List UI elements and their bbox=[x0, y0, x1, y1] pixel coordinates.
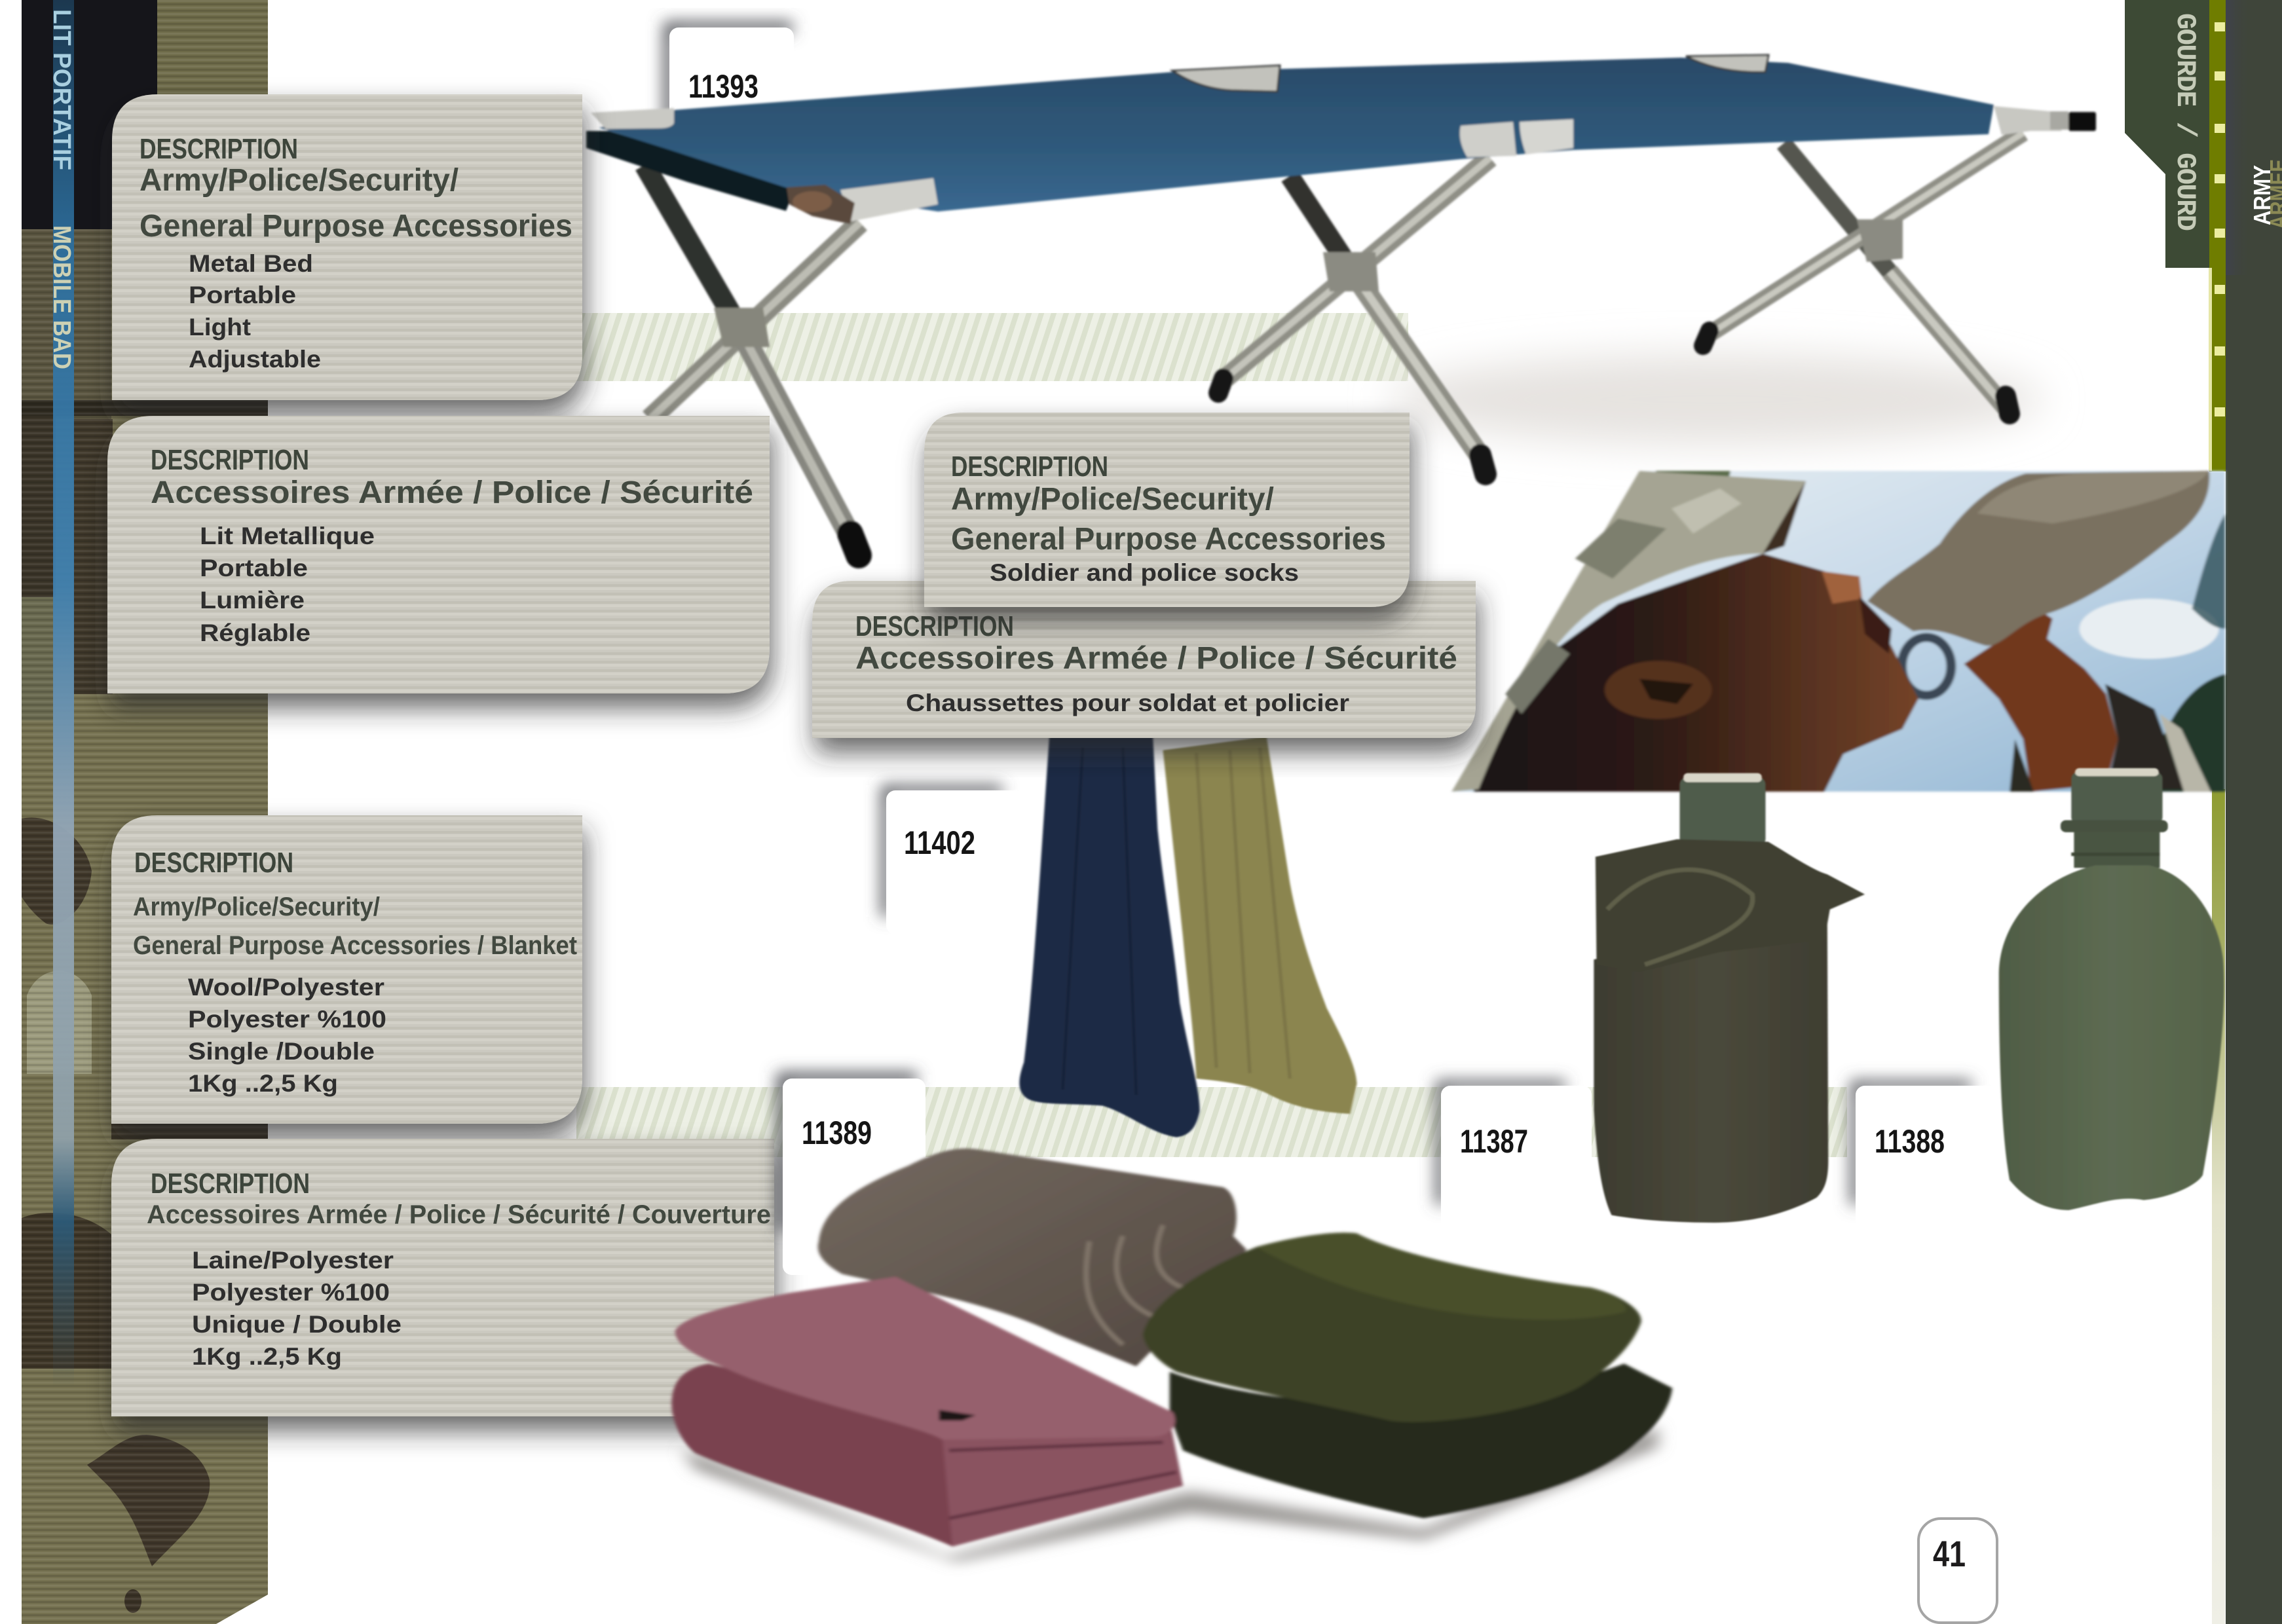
head bbox=[1473, 553, 1918, 792]
panel: blanket english bbox=[111, 815, 582, 1124]
socks bbox=[1019, 737, 1356, 1137]
black top band bbox=[22, 0, 157, 229]
photo background bbox=[1451, 471, 2225, 792]
canteen with cover bbox=[1594, 773, 1865, 1223]
sleeve bbox=[2105, 684, 2184, 789]
cap bbox=[1679, 777, 1765, 847]
panel text: Laine/Polyester bbox=[192, 1247, 394, 1274]
canteen in photo bbox=[1867, 471, 2209, 646]
folding bed bbox=[586, 55, 2096, 555]
panel text: General Purpose Accessories bbox=[951, 522, 1386, 557]
page number box bbox=[1918, 1519, 1997, 1623]
panel text bbox=[140, 133, 572, 373]
panel text: DESCRIPTION bbox=[855, 610, 1014, 642]
middle leg set bbox=[1218, 158, 1490, 474]
bed legs bbox=[645, 133, 2023, 555]
panel text: Single /Double bbox=[188, 1038, 375, 1065]
right green column bbox=[2125, 0, 2282, 1624]
panel: bed english bbox=[112, 94, 582, 400]
bed frame brackets bbox=[591, 55, 2096, 224]
panel text: Lit Metallique bbox=[200, 523, 375, 549]
bed underside bbox=[586, 131, 796, 211]
mauve blanket bbox=[672, 1363, 1183, 1547]
label: 11402 bbox=[886, 790, 1043, 934]
panel: bed french bbox=[107, 416, 770, 693]
panel text: Wool/Polyester bbox=[188, 974, 384, 1001]
panel text: DESCRIPTION bbox=[151, 444, 309, 476]
panel text: Light bbox=[189, 314, 251, 341]
panel text: DESCRIPTION bbox=[140, 133, 298, 165]
label: 11402: 11402 bbox=[904, 824, 975, 861]
panel text: Army/Police/Security/ bbox=[951, 482, 1274, 517]
tick marks bbox=[2215, 22, 2225, 416]
trees bbox=[2149, 674, 2225, 792]
far leg set bbox=[1703, 133, 2023, 414]
navy sock bbox=[1019, 737, 1200, 1137]
tab: gourde bbox=[2125, 0, 2209, 268]
panel text: 1Kg ..2,5 Kg bbox=[192, 1343, 342, 1370]
clouds bbox=[2080, 599, 2219, 659]
panel text: Réglable bbox=[200, 619, 310, 646]
cap bbox=[2071, 771, 2163, 824]
panel text: Polyester %100 bbox=[188, 1006, 386, 1033]
arm and hand bbox=[1964, 606, 2118, 792]
tab label: GOURDE / GOURD bbox=[2169, 13, 2201, 231]
fading lower stripe bbox=[2212, 789, 2225, 1624]
near leg set bbox=[645, 165, 860, 555]
cover body bbox=[1594, 910, 1828, 1223]
panel text: Army/Police/Security/ bbox=[140, 163, 458, 198]
cover flap bbox=[1596, 840, 1865, 972]
striped band: top bbox=[576, 313, 1408, 381]
blanket shadow bbox=[682, 1426, 1658, 1562]
olive stripe bbox=[2209, 0, 2226, 471]
panel text bbox=[951, 451, 1386, 586]
panel text bbox=[855, 610, 1457, 716]
panel text: Portable bbox=[200, 555, 308, 581]
photo: soldier drinking bbox=[1451, 471, 2225, 792]
panel text: DESCRIPTION bbox=[151, 1168, 310, 1200]
panel text: DESCRIPTION bbox=[951, 451, 1108, 483]
striped band: bottom bbox=[576, 1087, 1847, 1157]
panel text: Unique / Double bbox=[192, 1311, 402, 1338]
floor shadow under bed bbox=[1389, 354, 2044, 445]
panel: socks english bbox=[924, 413, 1410, 607]
brown blanket bbox=[818, 1149, 1246, 1367]
label: 11389 bbox=[783, 1079, 926, 1275]
panel text: Accessoires Armée / Police / Sécurité bbox=[855, 641, 1457, 676]
panel text: General Purpose Accessories bbox=[140, 209, 572, 244]
bed fabric bbox=[599, 58, 1994, 212]
panel text: General Purpose Accessories / Blanket bbox=[133, 931, 577, 960]
label: 11393 bbox=[669, 28, 794, 126]
panel text: Chaussettes pour soldat et policier bbox=[906, 690, 1349, 716]
panel text: Polyester %100 bbox=[192, 1279, 390, 1306]
panel text bbox=[147, 1168, 771, 1370]
plastic canteen bbox=[1999, 768, 2224, 1210]
hat bbox=[1451, 471, 1806, 792]
left camouflage strip bbox=[22, 0, 268, 1624]
panel text: 1Kg ..2,5 Kg bbox=[188, 1070, 338, 1097]
panel text: Lumière bbox=[200, 587, 305, 614]
panel text: Army/Police/Security/ bbox=[133, 893, 380, 921]
page number box: 41 bbox=[1933, 1533, 1966, 1574]
panel: socks french bbox=[812, 581, 1476, 738]
panel: blanket french bbox=[111, 1139, 774, 1416]
panel text: Accessoires Armée / Police / Sécurité bbox=[151, 475, 753, 510]
panel text: DESCRIPTION bbox=[134, 847, 293, 879]
body bbox=[1999, 865, 2224, 1210]
panel text: Portable bbox=[189, 282, 296, 308]
panel text: Adjustable bbox=[189, 346, 321, 373]
ear bbox=[1605, 661, 1712, 719]
label: 11387: 11387 bbox=[1460, 1123, 1528, 1160]
label: 11389: 11389 bbox=[802, 1115, 872, 1151]
olive blanket bbox=[1170, 1363, 1672, 1519]
panel text bbox=[133, 847, 577, 1097]
panel text: Soldier and police socks bbox=[990, 559, 1299, 586]
label: 11387 bbox=[1441, 1086, 1592, 1236]
side label: lit portatif: LIT PORTATIF bbox=[48, 9, 75, 170]
label: 11388 bbox=[1856, 1086, 2000, 1236]
side label: mobile bad: MOBILE BAD bbox=[48, 225, 75, 369]
label: 11393: 11393 bbox=[688, 68, 758, 105]
olive top band bbox=[157, 0, 268, 94]
section title: army: ARMY bbox=[2249, 165, 2275, 225]
blue vertical strip bbox=[53, 0, 74, 1388]
blankets bbox=[672, 1149, 1672, 1562]
panel text bbox=[151, 444, 753, 646]
khaki sock bbox=[1163, 737, 1356, 1114]
label: 11388: 11388 bbox=[1875, 1123, 1945, 1160]
panel text: Accessoires Armée / Police / Sécurité / Couverture bbox=[147, 1200, 771, 1229]
panel text: Metal Bed bbox=[189, 250, 313, 277]
